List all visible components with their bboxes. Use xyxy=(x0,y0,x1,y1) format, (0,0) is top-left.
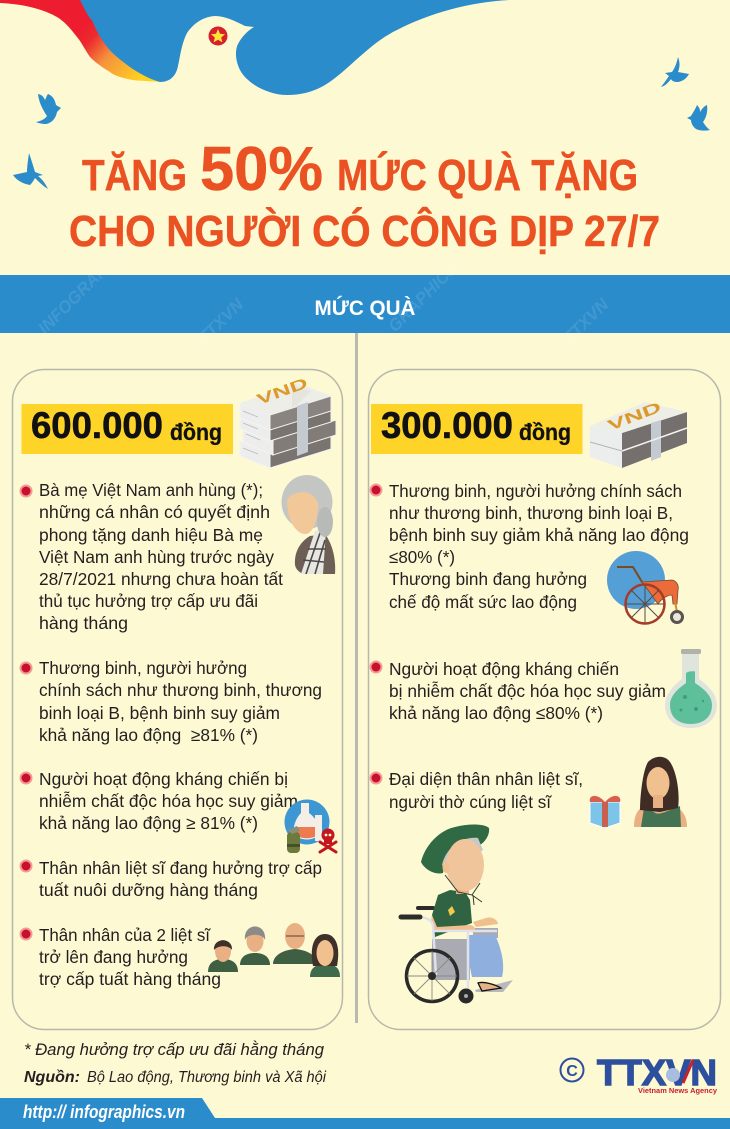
amount badge: đồng xyxy=(170,419,222,445)
bullet 3: Người hoạt động kháng chiến bị xyxy=(39,769,288,789)
section band: mức quà: TTXVN xyxy=(194,294,248,348)
icon: money stack xyxy=(240,375,336,468)
trousers xyxy=(468,935,503,977)
section band: mức quà: GRAPHICS xyxy=(384,258,462,336)
bullet 1: Việt Nam anh hùng trước ngày xyxy=(39,547,274,567)
footer bar with url xyxy=(0,1098,730,1129)
bullet 1: phong tặng danh hiệu Bà mẹ xyxy=(39,525,263,545)
bullet 1: 28/7/2021 nhưng chưa hoàn tất xyxy=(39,569,283,589)
hair xyxy=(442,838,483,875)
logo: TTXVN: Vietnam News Agency xyxy=(638,1086,718,1095)
icon: old mother xyxy=(282,475,335,574)
hat xyxy=(421,824,489,873)
bullet 4: Thân nhân liệt sĩ đang hưởng trợ cấp xyxy=(39,858,322,878)
bullet 2: khả năng lao động ≥81% (*) xyxy=(39,725,258,745)
icon: star medallion xyxy=(208,26,228,46)
bullet 2: binh loại B, bệnh binh suy giảm xyxy=(39,703,280,723)
note and source: Bộ Lao động, Thương binh và Xã hội xyxy=(87,1069,327,1086)
shirt xyxy=(432,890,472,937)
bullet 5: trợ cấp tuất hàng tháng xyxy=(39,969,221,989)
section band: mức quà: TTXVN xyxy=(559,294,613,348)
bullet 1: thủ tục hưởng trợ cấp ưu đãi xyxy=(39,591,258,611)
bullet 2 xyxy=(370,659,666,723)
neck xyxy=(456,882,469,894)
bullet 5 xyxy=(20,925,221,989)
icon: family members xyxy=(208,923,340,977)
title: TĂNG xyxy=(82,150,187,200)
bullet 3 xyxy=(20,769,298,833)
hat strap xyxy=(445,875,482,905)
bullet 1: Thương binh đang hưởng xyxy=(389,569,587,589)
bullet 5: Thân nhân của 2 liệt sĩ xyxy=(39,925,211,945)
bullet 2: Người hoạt động kháng chiến xyxy=(389,659,619,679)
note and source: * Đang hưởng trợ cấp ưu đãi hằng tháng xyxy=(24,1040,325,1059)
wheels xyxy=(406,950,474,1004)
bullet 1: như thương binh, thương binh loại B, xyxy=(389,503,673,523)
ribbon xyxy=(0,0,160,82)
frame and seat xyxy=(418,908,498,980)
logo: TTXVN: C xyxy=(566,1063,578,1080)
icon: money stack xyxy=(590,399,687,468)
icon: veteran in wheelchair xyxy=(401,824,513,1004)
amount badge: 300.000 xyxy=(381,405,513,446)
bullet 4 xyxy=(20,858,322,900)
section band: mức quà: MỨC QUÀ xyxy=(314,296,416,320)
title: MỨC QUÀ TẶNG xyxy=(337,150,638,200)
bullet 5: trở lên đang hưởng xyxy=(39,947,188,967)
bullet 3: nhiễm chất độc hóa học suy giảm xyxy=(39,790,298,811)
bullet 3: khả năng lao động ≥ 81% (*) xyxy=(39,813,258,833)
panel: 300.000 đồng xyxy=(368,370,720,1030)
panel: 600.000 đồng xyxy=(12,370,342,1030)
section band: mức quà: INFOGRAPHICS xyxy=(34,232,140,338)
bullet 1: những cá nhân có quyết định xyxy=(39,502,270,522)
bullet 1: bệnh binh suy giảm khả năng lao động xyxy=(389,525,689,545)
title: CHO NGƯỜI CÓ CÔNG DỊP 27/7 xyxy=(69,205,660,256)
chair tubes xyxy=(420,917,497,990)
amount badge: đồng xyxy=(519,419,571,445)
icon: money stack: VND xyxy=(255,375,310,409)
arms xyxy=(431,915,498,932)
icon: blue birds xyxy=(13,57,710,189)
amount badge xyxy=(371,404,582,454)
bullet 2: khả năng lao động ≤80% (*) xyxy=(389,703,603,723)
logo: TTXVN: TTXVN xyxy=(597,1052,717,1093)
icon: money stack: VND xyxy=(605,399,664,435)
note and source: Nguồn: xyxy=(24,1069,80,1086)
bullet 2: Thương binh, người hưởng xyxy=(39,658,247,678)
bullet 1: Bà mẹ Việt Nam anh hùng (*); xyxy=(39,480,263,500)
footer bar with url: http:// infographics.vn xyxy=(23,1102,185,1122)
face xyxy=(446,839,484,891)
icon: flask xyxy=(665,649,717,728)
dove banner xyxy=(0,0,510,95)
amount badge: 600.000 xyxy=(31,405,163,446)
note and source xyxy=(24,1040,327,1086)
bullet 1: Thương binh, người hưởng chính sách xyxy=(389,481,682,501)
section band: mức quà xyxy=(0,232,730,348)
title: 50% xyxy=(200,135,323,204)
bullet 1: hàng tháng xyxy=(39,613,128,633)
bullet 3: Đại diện thân nhân liệt sĩ, xyxy=(389,769,583,789)
bullet 3 xyxy=(370,769,583,812)
icon: chemicals and skull xyxy=(284,800,336,853)
icon: woman xyxy=(634,757,687,827)
title xyxy=(69,135,660,256)
bullet 2: chính sách như thương binh, thương xyxy=(39,680,322,700)
foot rest and sandal xyxy=(475,980,513,992)
amount badge xyxy=(22,404,233,454)
bullet 1 xyxy=(20,480,283,633)
bullet 2 xyxy=(20,658,322,745)
bullet 1: chế độ mất sức lao động xyxy=(389,592,577,612)
bullet 2: bị nhiễm chất độc hóa học suy giảm xyxy=(389,680,666,701)
icon: wheelchair xyxy=(607,551,682,624)
bullet 1: ≤80% (*) xyxy=(389,547,455,567)
bullet 4: tuất nuôi dưỡng hàng tháng xyxy=(39,880,258,900)
blue dove background xyxy=(78,0,510,95)
bullet 1 xyxy=(370,481,689,612)
bullet 3: người thờ cúng liệt sĩ xyxy=(389,792,552,812)
icon: gift xyxy=(590,796,620,828)
